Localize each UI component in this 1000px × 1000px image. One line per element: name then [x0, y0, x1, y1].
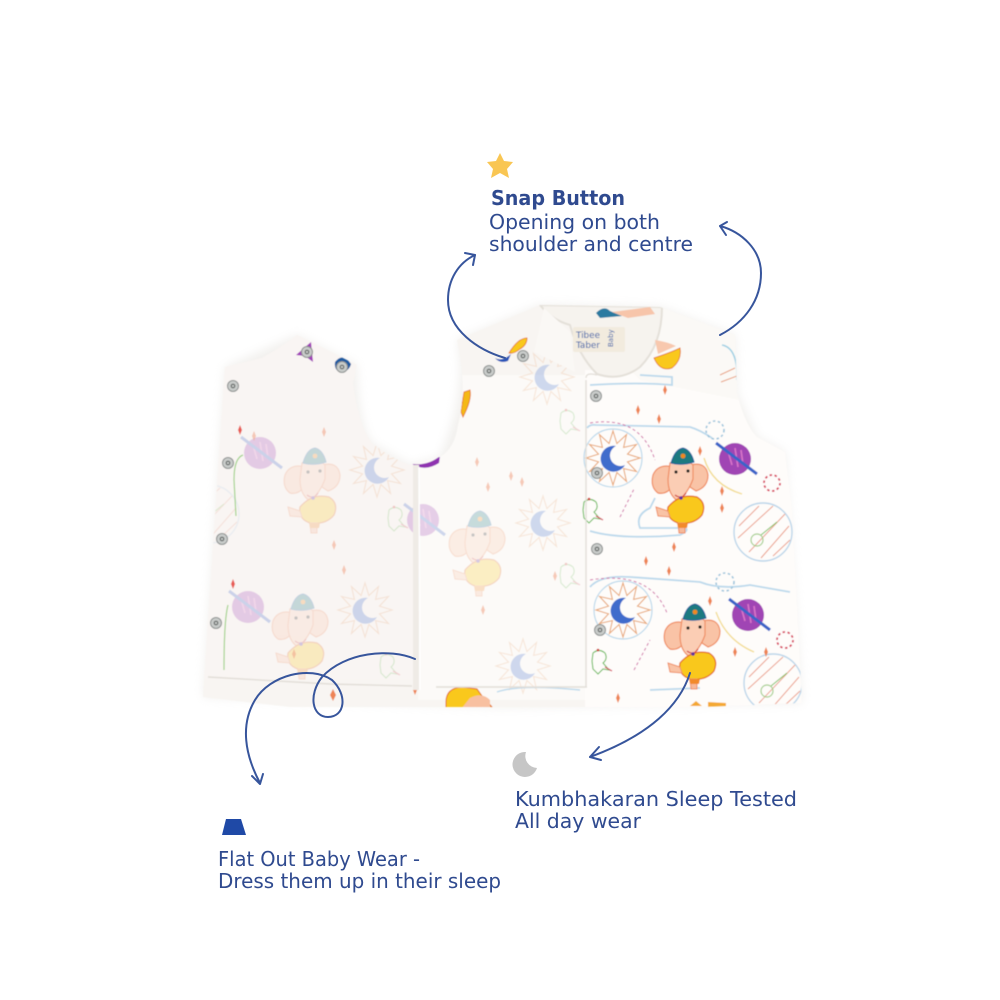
neck print top — [596, 308, 622, 318]
print: purple planets — [716, 443, 757, 475]
arrow: looping to flat out text — [246, 653, 415, 784]
green stitch lines — [224, 455, 243, 670]
garment: open baby vest — [181, 305, 810, 715]
right placket edge — [585, 380, 587, 687]
brand label: Baby — [607, 329, 615, 347]
text: opening description: Opening on both — [489, 210, 660, 234]
print: ganesha motifs — [652, 448, 708, 533]
garment shadow — [203, 305, 802, 707]
neck opening: inner back — [540, 305, 662, 377]
print: striped planets — [734, 503, 792, 561]
icon: blue trapezoid — [222, 819, 246, 835]
coloured shoulder print — [296, 342, 313, 362]
callout: sleep tested: All day wear — [515, 809, 642, 833]
print: dashed trails — [590, 422, 667, 670]
brand label text: Tibee — [575, 331, 600, 341]
arrow: right of snap button text — [720, 222, 761, 335]
armhole edge print — [722, 345, 737, 380]
yellow collar-side motifs — [509, 338, 527, 353]
brand label: Taber — [575, 341, 600, 351]
brand label — [573, 327, 625, 352]
hem fold line — [208, 677, 587, 687]
heading: snap button: Snap Button — [491, 186, 625, 210]
arrow: to sleep tested text — [590, 673, 690, 760]
hem bright print — [446, 687, 492, 708]
icon: crescent moon — [513, 752, 537, 777]
centre pleat — [413, 465, 419, 690]
callout: flat out baby wear — [218, 847, 501, 893]
right front panel — [585, 370, 810, 715]
print: frogs — [583, 498, 603, 523]
panel: clipped fabric areas and print — [181, 305, 810, 715]
print: yellow arcs — [704, 458, 754, 652]
icon: star — [487, 153, 513, 178]
callout: flat out baby wear: Flat Out Baby Wear - — [218, 847, 420, 871]
print: dotted rings — [706, 421, 793, 648]
callout: flat out baby wear: Dress them up in their sleep — [218, 869, 501, 893]
arrow: left of snap button text — [448, 253, 505, 358]
callout: sleep tested: Kumbhakaran Sleep Tested — [515, 787, 797, 811]
faded print: left and centre panels — [181, 350, 580, 693]
callout: snap button — [489, 186, 693, 256]
collar band edge — [544, 308, 572, 368]
callout: snap button: shoulder and centre — [489, 232, 693, 256]
snap buttons — [210, 346, 606, 636]
print: clouds — [584, 375, 790, 690]
left back panel shade — [200, 330, 415, 680]
print: sun and moon — [586, 431, 640, 485]
print: orange diamonds — [616, 385, 768, 703]
centre panel — [462, 399, 464, 412]
right shoulder — [630, 307, 740, 400]
garment base fabric — [203, 305, 802, 707]
callout: sleep tested — [515, 787, 797, 833]
